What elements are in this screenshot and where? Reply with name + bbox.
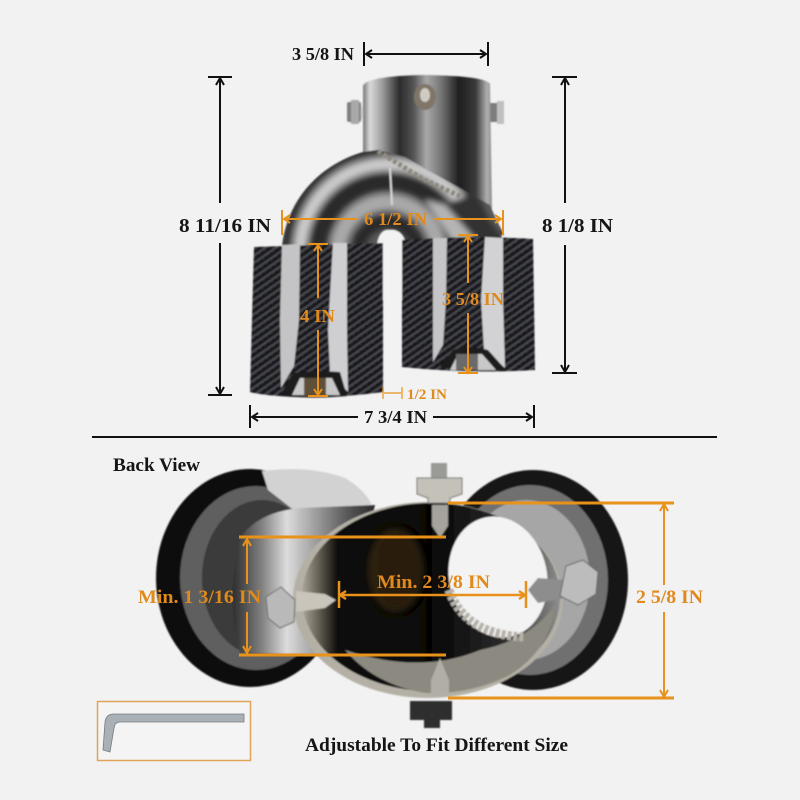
exhaust tip front photo bbox=[250, 75, 535, 398]
left connecting pipe bbox=[232, 505, 375, 655]
exhaust tip back photo bbox=[156, 463, 628, 728]
dimension: 2 5/8 IN: 2 5/8 IN bbox=[636, 587, 703, 608]
dimension: 4 IN bbox=[300, 244, 335, 396]
dimension: inlet width 3 5/8 IN bbox=[292, 42, 488, 66]
dimension: overall width 7 3/4 IN: 7 3/4 IN bbox=[364, 407, 427, 427]
right carbon tip bbox=[402, 237, 535, 371]
dimension: left height 8 11/16 IN: 8 11/16 IN bbox=[179, 215, 272, 237]
dimension: 4 IN: 4 IN bbox=[300, 306, 335, 326]
dimension: 3 5/8 IN right tip bbox=[442, 235, 504, 373]
left bolt on inlet pipe bbox=[347, 100, 368, 124]
dimension: inlet width 3 5/8 IN: 3 5/8 IN bbox=[292, 44, 354, 64]
front oval outlet bbox=[293, 502, 563, 698]
dimension: 2 5/8 IN bbox=[448, 503, 703, 698]
dimension: 1/2 IN gap bbox=[383, 387, 447, 403]
arch gap bbox=[377, 230, 406, 300]
inlet pipe bbox=[363, 75, 504, 235]
left outlet ring bbox=[156, 469, 372, 687]
right outlet ring bbox=[438, 470, 628, 690]
clamp bolt on inlet pipe bbox=[414, 84, 436, 110]
right bolt bbox=[528, 560, 598, 605]
inner weld ring bbox=[449, 590, 525, 637]
caption: adjustable fit: Adjustable To Fit Different Size bbox=[305, 736, 568, 756]
left bolt bbox=[266, 587, 336, 628]
weld seam bbox=[378, 151, 462, 197]
inset: hex key wrench bbox=[98, 702, 250, 760]
bottom bolt bbox=[410, 658, 452, 728]
dimension: Min. 2 3/8 IN: Min. 2 3/8 IN bbox=[377, 572, 490, 593]
dimension: Min. 2 3/8 IN bbox=[339, 572, 526, 608]
left carbon tip bbox=[250, 243, 383, 398]
dimension: 6 1/2 IN: 6 1/2 IN bbox=[364, 209, 427, 229]
dimension: overall width 7 3/4 IN bbox=[250, 405, 534, 428]
section divider bbox=[92, 436, 717, 438]
dimension: 6 1/2 IN bbox=[282, 209, 503, 235]
inner brushed steel crescent bbox=[345, 605, 555, 693]
dimension: right height 8 1/8 IN: 8 1/8 IN bbox=[542, 215, 614, 237]
top bolt bbox=[417, 463, 462, 538]
dimension: 1/2 IN gap: 1/2 IN bbox=[407, 387, 447, 403]
see-through opening bbox=[437, 507, 559, 647]
dimension: left height 8 11/16 IN bbox=[179, 77, 272, 395]
right bolt on inlet pipe bbox=[488, 101, 504, 124]
dimension: 3 5/8 IN right tip: 3 5/8 IN bbox=[442, 289, 504, 309]
interior brown reflection bbox=[367, 528, 423, 612]
dimension: Min. 1 3/16 IN: Min. 1 3/16 IN bbox=[138, 587, 261, 608]
curved arch pipe bbox=[281, 149, 502, 247]
dimension: Min. 1 3/16 IN bbox=[138, 537, 446, 655]
dimension: right height 8 1/8 IN bbox=[542, 77, 614, 373]
heading: Back View: Back View bbox=[113, 455, 200, 476]
